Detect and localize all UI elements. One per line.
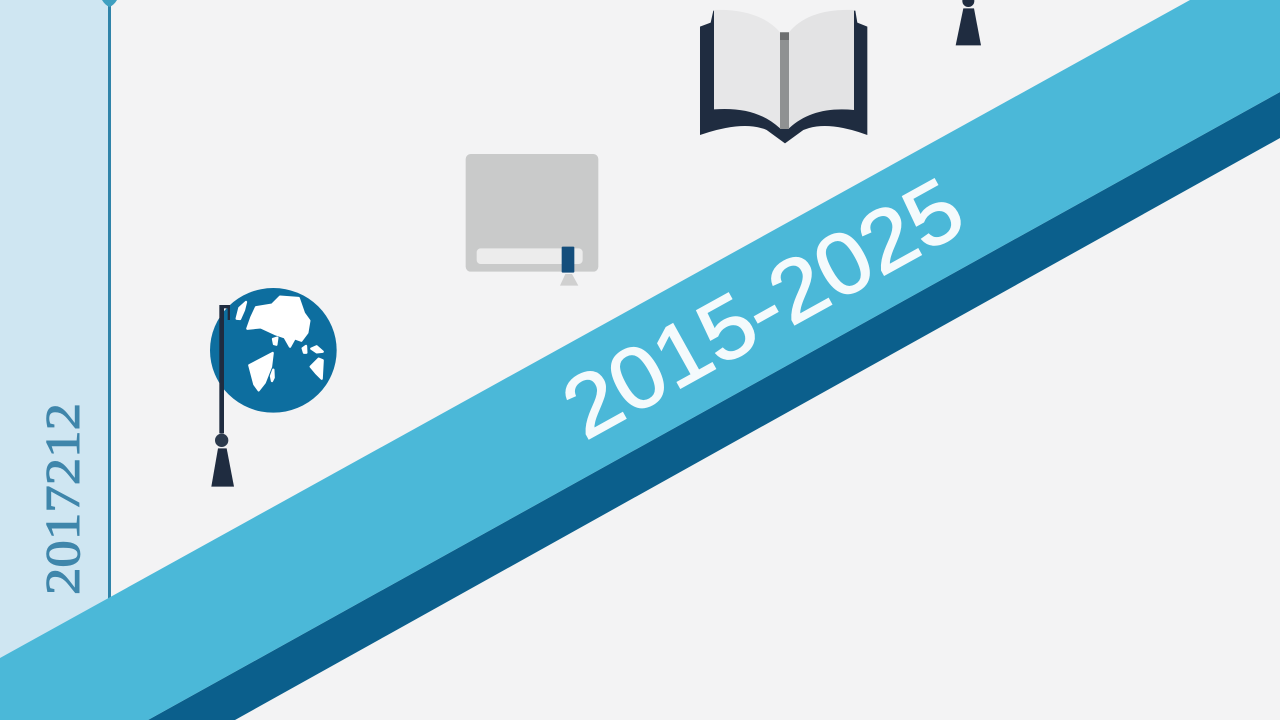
- ribbon year label: 2015-2025: [547, 159, 979, 458]
- tassel cord: [219, 305, 230, 433]
- ribbon shadow band: [148, 92, 1280, 720]
- book cover: [700, 11, 867, 143]
- page strip: [477, 248, 583, 264]
- icon: top tassel: [956, 0, 981, 45]
- bookmark tail: [560, 274, 578, 286]
- vertical timeline line: [108, 0, 111, 620]
- tassel fringe: [211, 448, 234, 487]
- right page: [789, 10, 854, 128]
- left page: [714, 10, 780, 128]
- timeline pin: [102, 0, 117, 7]
- bookmark ribbon: [562, 247, 574, 273]
- icon: open book: [700, 10, 867, 143]
- tassel bead: [215, 434, 228, 447]
- icon: globe with tassel: [210, 288, 337, 487]
- icon: closed grey book: [466, 154, 598, 286]
- vertical year label: 2017212: [35, 403, 90, 595]
- globe: [210, 288, 337, 413]
- book spine: [780, 32, 789, 129]
- left timeline panel: [0, 0, 117, 720]
